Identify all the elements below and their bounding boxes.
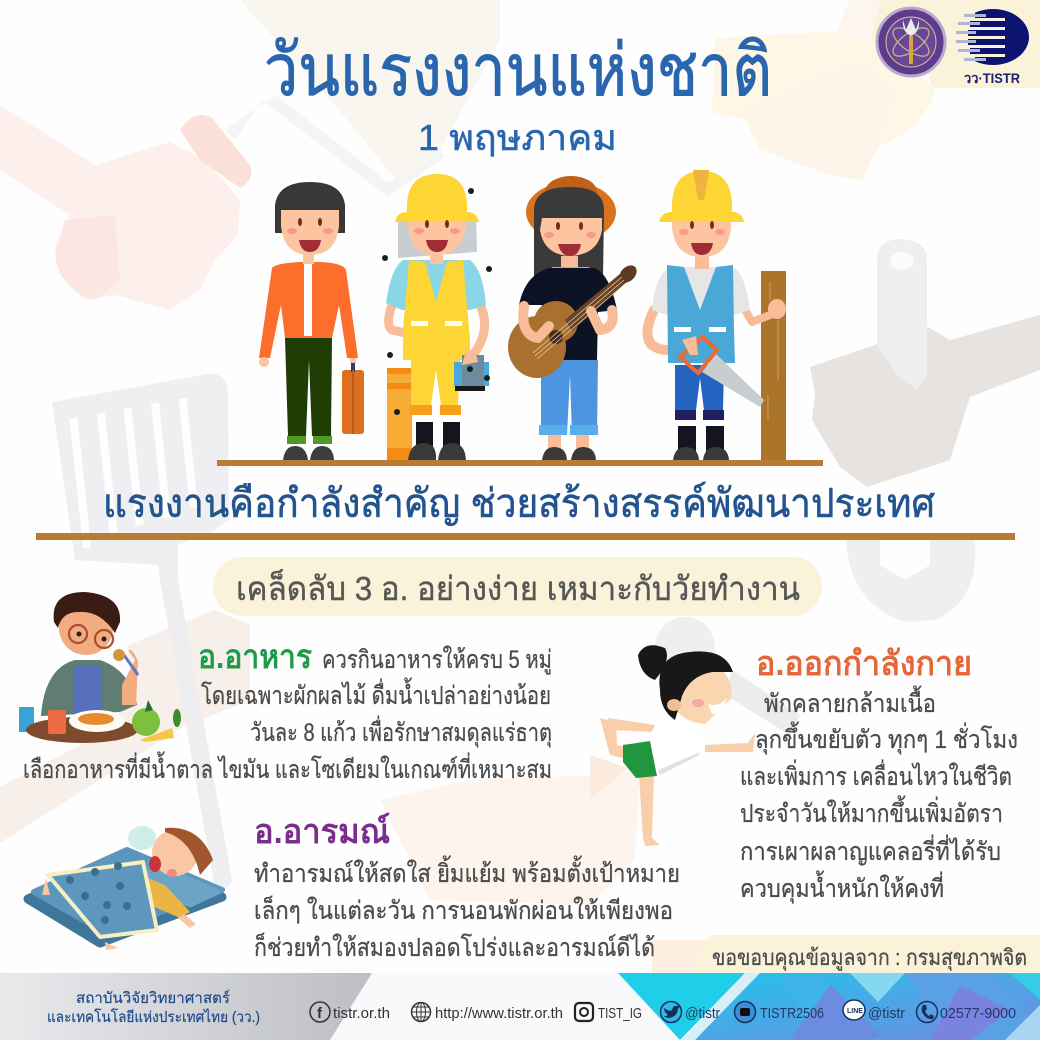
- heading pill: tips: เคล็ดลับ 3 อ. อย่างง่าย เหมาะกับวัยทำงาน: [236, 569, 800, 607]
- footer: line: @tistr: [868, 1006, 905, 1022]
- footer: instagram: [575, 1003, 642, 1022]
- footer: facebook: tistr.or.th: [333, 1006, 390, 1022]
- footer: twitter: [660, 1002, 720, 1022]
- icon: man eating: [19, 592, 181, 743]
- section: exercise: พักคลายกล้ามเนื้อ: [764, 685, 936, 718]
- footer: blue geometric band: [618, 973, 1040, 1040]
- worker: carpenter: [647, 170, 786, 462]
- footer: organisation name: สถาบันวิจัยวิทยาศาสตร์: [76, 990, 230, 1007]
- footer: youtube: TISTR2506: [760, 1006, 824, 1022]
- section: food: โดยเฉพาะผักผลไม้ ดื่มน้ำเปล่าอย่างน้อย: [201, 677, 551, 710]
- section: emotion: ทำอารมณ์ให้สดใส ยิ้มแย้ม พร้อมตั้งเป้าหมาย: [254, 855, 680, 888]
- footer: instagram: TIST_IG: [598, 1006, 642, 1022]
- section: exercise: อ.ออกกำลังกาย: [756, 645, 972, 683]
- credit pill: [693, 935, 1040, 975]
- footer: organisation name: และเทคโนโลยีแห่งประเทศไทย (วว.): [47, 1008, 260, 1026]
- section: emotion: อ.อารมณ์: [254, 812, 390, 851]
- section: exercise: [740, 645, 1018, 904]
- section: food: วันละ 8 แก้ว เพื่อรักษาสมดุลแร่ธาตุ: [250, 715, 552, 748]
- logo: ministry seal: [877, 8, 945, 76]
- icon: yoga woman: [600, 645, 755, 846]
- footer: line: LINE: [847, 1008, 863, 1015]
- subtitle: date: 1 พฤษภาคม: [418, 117, 617, 158]
- section: food: ควรกินอาหารให้ครบ 5 หมู่: [322, 645, 552, 675]
- icon: sleeping child: [28, 826, 222, 950]
- footer: twitter: @tistr: [685, 1006, 720, 1022]
- footer: [0, 973, 1040, 1040]
- title: วันแรงงานแห่งชาติ: [264, 31, 772, 111]
- logos: [877, 5, 1029, 86]
- slogan: แรงงานคือกำลังสำคัญ ช่วยสร้างสรรค์พัฒนาประเทศ: [103, 481, 935, 526]
- footer: organisation name: [47, 990, 260, 1026]
- section: food: [23, 638, 552, 784]
- footer: line: [843, 1000, 905, 1022]
- footer: facebook: [310, 1002, 390, 1022]
- worker: musician: [508, 176, 640, 460]
- footer: youtube: [734, 1002, 824, 1022]
- section: exercise: การเผาผลาญแคลอรี่ที่ได้รับ: [740, 834, 1001, 866]
- section: emotion: [254, 812, 680, 962]
- worker: office: [259, 182, 364, 460]
- footer: phone: 02577-9000: [940, 1006, 1016, 1022]
- section: emotion: ก็ช่วยทำให้สมองปลอดโปร่งและอารมณ์ดีได้: [254, 932, 655, 962]
- worker: beekeeper: [382, 174, 492, 460]
- footer: phone: [916, 1002, 1016, 1022]
- footer: website: http://www.tistr.or.th: [435, 1006, 563, 1022]
- logo: TISTR: วว·TISTR: [964, 70, 1020, 86]
- section: exercise: ควบคุมน้ำหนักให้คงที่: [740, 870, 944, 904]
- heading pill: tips: [213, 557, 822, 616]
- footer: facebook: f: [317, 1005, 323, 1022]
- section: food: อ.อาหาร: [198, 638, 312, 675]
- ground line: [217, 460, 823, 466]
- workers illustration: [217, 170, 823, 466]
- logo: TISTR: [950, 5, 1029, 86]
- section: emotion: เล็กๆ ในแต่ละวัน การนอนพักผ่อนให้เพียงพอ: [254, 895, 673, 925]
- section: food: เลือกอาหารที่มีน้ำตาล ไขมัน และโซเดียมในเกณฑ์ที่เหมาะสม: [23, 751, 552, 784]
- footer: website: [412, 1002, 563, 1022]
